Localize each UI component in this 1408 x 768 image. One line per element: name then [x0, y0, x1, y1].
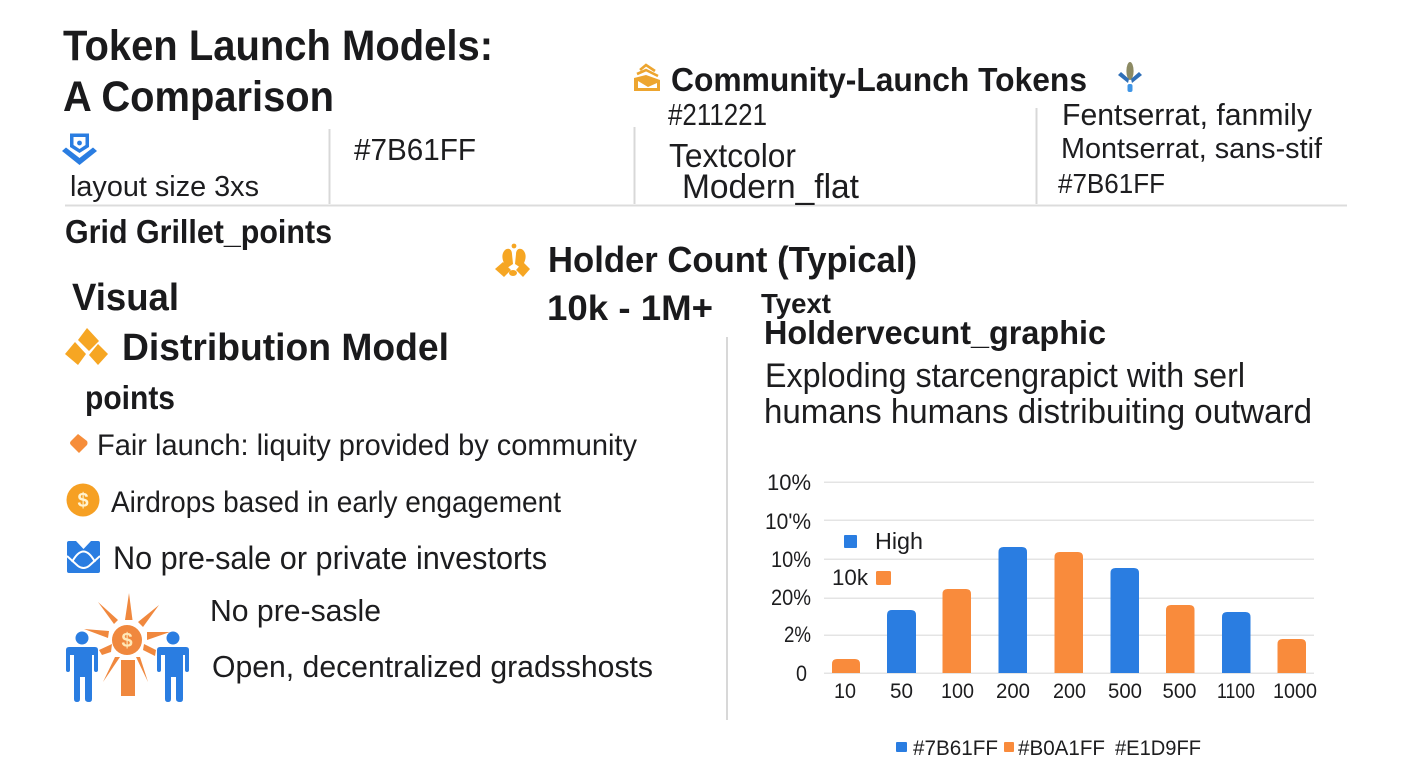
y axis labels: 10% — [771, 547, 811, 572]
x axis labels: 500 — [1162, 680, 1196, 703]
text: visual: Visual — [72, 277, 179, 319]
x axis labels: 1000 — [1273, 680, 1317, 703]
heading: community-launch tokens: Community-Launch Tokens — [671, 61, 1087, 98]
title: A Comparison — [63, 73, 334, 121]
bottom legend: #7B61FF — [913, 737, 998, 760]
y axis labels: 10% — [767, 470, 811, 495]
icon: stacked layers — [634, 65, 660, 91]
icon: blue shield — [62, 134, 97, 165]
text: font column: Montserrat, sans-stif — [1061, 133, 1323, 165]
heading: grid grillet points: Grid Grillet_points — [65, 213, 332, 250]
bars — [832, 547, 1306, 673]
text: text colour column: #211221 — [668, 97, 767, 132]
panel: holder count: 10k - 1M+ — [547, 289, 713, 328]
text: font column: #7B61FF — [1058, 168, 1165, 199]
x axis labels: 50 — [890, 680, 913, 703]
panel: distribution model — [65, 277, 653, 702]
icon: sprout — [1118, 62, 1142, 92]
icon: exploding star with humans — [66, 593, 189, 702]
text: text colour column: Modern_flat — [682, 168, 860, 206]
heading: holder graphic: Holdervecunt_graphic — [764, 314, 1106, 351]
bottom legend: #E1D9FF — [1115, 737, 1201, 760]
bottom legend — [896, 737, 1201, 760]
x axis labels: 100 — [941, 680, 974, 703]
header strip — [62, 97, 1347, 206]
text: tyext: Tyext — [761, 288, 831, 319]
text: layout size: layout size 3xs — [70, 171, 259, 203]
y axis labels: 0 — [796, 661, 807, 686]
panel: holder count — [495, 239, 917, 328]
bullet: airdrops: $ — [77, 490, 89, 512]
y axis labels: 20% — [771, 585, 811, 610]
title: Token Launch Models: — [63, 22, 493, 70]
panel: holder count graphic — [761, 288, 1317, 760]
bullet: airdrops: Airdrops based in early engagement — [111, 486, 562, 519]
icon: exploding star with humans: $ — [121, 630, 133, 652]
x axis labels: 200 — [1053, 680, 1086, 703]
bullet: no pre-sale: No pre-sale or private investorts — [113, 540, 547, 576]
inline legend: High — [875, 528, 923, 554]
text: description — [764, 357, 1312, 431]
text: text colour column: Textcolor — [669, 137, 796, 174]
x axis labels: 200 — [996, 680, 1030, 703]
text: colour code: #7B61FF — [354, 132, 476, 167]
text: description: humans humans distribuiting outward — [764, 393, 1312, 431]
inline legend: 10k — [832, 565, 869, 590]
title — [63, 22, 493, 121]
y axis labels: 2% — [784, 622, 811, 647]
text: no pre-sasle: No pre-sasle — [210, 593, 381, 628]
x axis labels — [834, 680, 1317, 703]
inline legend — [832, 528, 923, 590]
text: open decentralized: Open, decentralized gradsshosts — [212, 649, 653, 684]
heading: distribution model: Distribution Model — [122, 327, 449, 369]
y axis labels — [765, 470, 811, 686]
bar chart — [765, 470, 1317, 760]
icon: orange figures — [495, 244, 530, 277]
y axis labels: 10'% — [765, 509, 811, 534]
text: description: Exploding starcengrapict with serl — [765, 357, 1245, 395]
x axis labels: 10 — [834, 680, 856, 703]
icon: orange diamonds — [65, 328, 108, 365]
bottom legend: #B0A1FF — [1018, 737, 1105, 760]
x axis labels: 1100 — [1217, 680, 1255, 703]
bullet: fair launch: Fair launch: liquity provided by community — [97, 429, 637, 462]
text: text colour column — [668, 97, 860, 206]
text: font column — [1058, 97, 1323, 199]
x axis labels: 500 — [1108, 680, 1142, 703]
panel: holder count: Holder Count (Typical) — [548, 239, 917, 280]
text: points: points — [85, 379, 175, 416]
text: font column: Fentserrat, fanmily — [1062, 97, 1312, 132]
